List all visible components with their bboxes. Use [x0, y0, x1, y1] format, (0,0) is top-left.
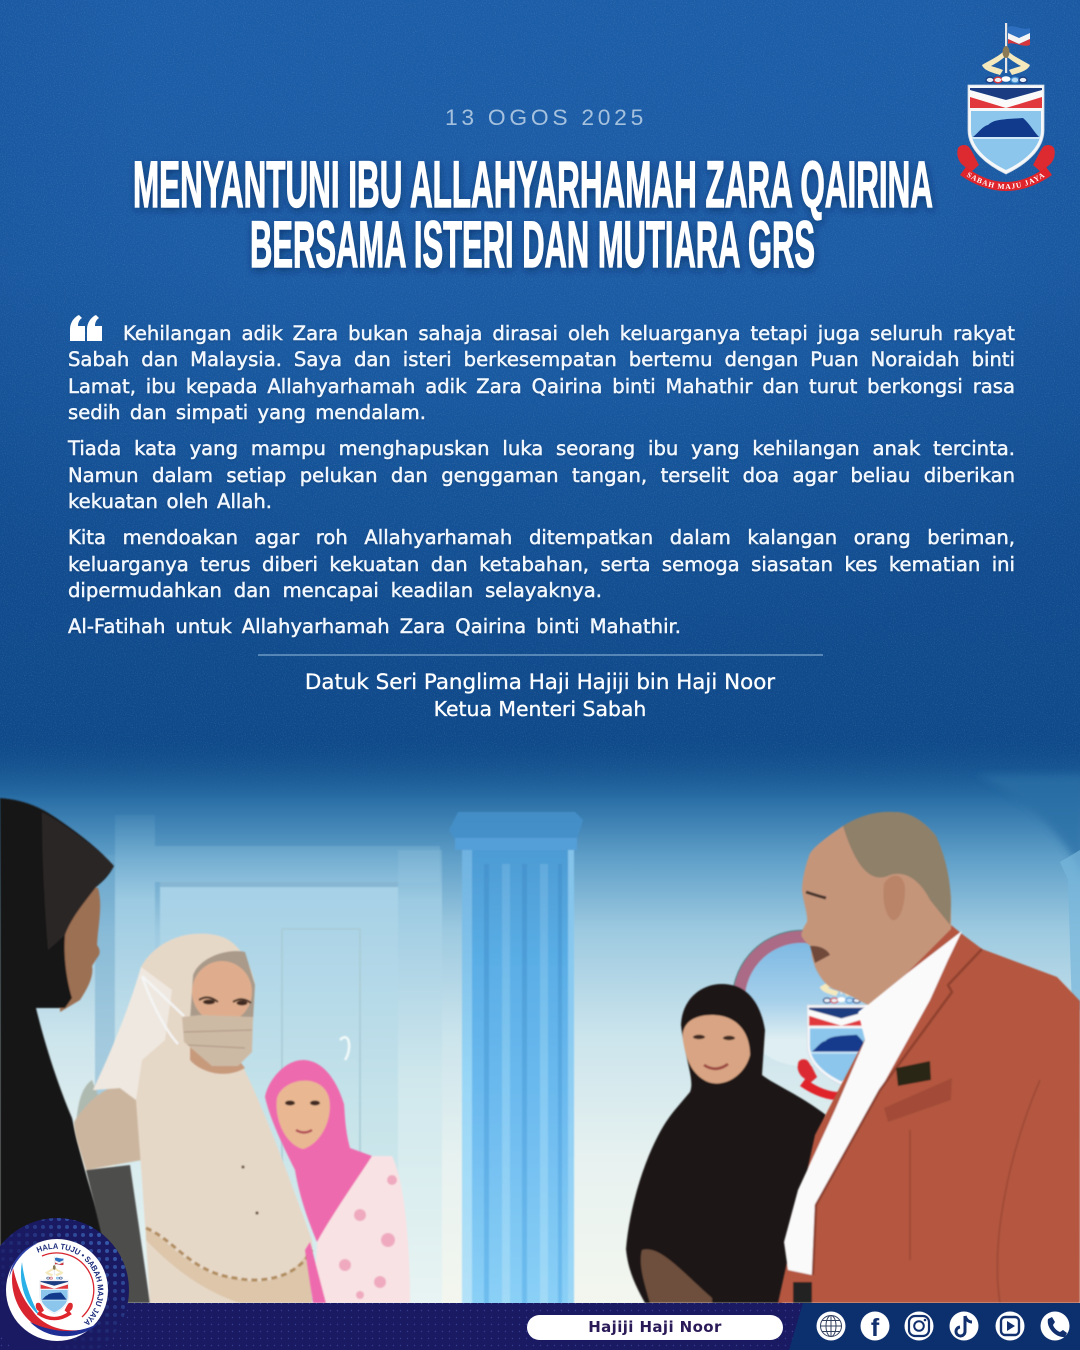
- social icons row: [816, 1312, 1070, 1342]
- signature role: Ketua Menteri Sabah: [434, 697, 646, 721]
- name pill: [527, 1315, 783, 1340]
- icon: globe: [816, 1312, 846, 1340]
- signature name: Datuk Seri Panglima Haji Hajiji bin Haji Noor: [305, 670, 775, 695]
- quote text: [68, 322, 1015, 638]
- date: 13 OGOS 2025: [445, 105, 647, 130]
- icon: Sabah crest: SABAH MAJU JAYA: [966, 172, 1045, 190]
- paragraph 1: [68, 322, 1015, 424]
- logo badge: Hala Tuju Sabah Maju Jaya: HALA TUJU • SABAH MAJU JAYA: [36, 1243, 104, 1325]
- icon: tiktok: [950, 1312, 978, 1340]
- icon: facebook: [860, 1312, 890, 1342]
- photo: blue pillar: [449, 812, 583, 1310]
- person: woman with pink hijab: [265, 1060, 410, 1303]
- paragraph 1: Lamat, ibu kepada Allahyarhamah adik Zara Qairina binti Mahathir dan turut berkongsi rasa: [68, 375, 1015, 398]
- paragraph 3: [68, 526, 1015, 602]
- paragraph 2: Namun dalam setiap pelukan dan genggaman tangan, terselit doa agar beliau diberikan: [68, 464, 1015, 487]
- title: [133, 147, 933, 281]
- paragraph 4: Al-Fatihah untuk Allahyarhamah Zara Qairina binti Mahathir.: [68, 615, 681, 638]
- icon: instagram: [904, 1312, 934, 1340]
- paragraph 1: Sabah dan Malaysia. Saya dan isteri berkesempatan bertemu dengan Puan Noraidah binti: [68, 348, 1015, 371]
- icon: phone: [1040, 1312, 1070, 1340]
- paragraph 2: kekuatan oleh Allah.: [68, 490, 272, 513]
- icon: facebook: f: [871, 1314, 880, 1342]
- person: woman with beige hijab and mask: [74, 934, 312, 1303]
- paragraph 3: dipermudahkan dan mencapai keadilan selayaknya.: [68, 579, 602, 602]
- logo badge: Hala Tuju Sabah Maju Jaya: [0, 1218, 129, 1349]
- date: [132, 105, 936, 281]
- paragraph 1: Kehilangan adik Zara bukan sahaja dirasai oleh keluarganya tetapi juga seluruh rakyat: [123, 322, 1015, 345]
- paragraph 3: Kita mendoakan agar roh Allahyarhamah ditempatkan dalam kalangan orang beriman,: [68, 526, 1015, 549]
- person: woman in black hijab on the right: [626, 984, 826, 1303]
- footer bar: [0, 1303, 1080, 1350]
- divider: [258, 654, 823, 656]
- icon: video play: [996, 1312, 1024, 1340]
- name pill: Hajiji Haji Noor: [588, 1318, 722, 1336]
- paragraph 2: [68, 437, 1015, 513]
- photo: door and frame: [95, 815, 442, 1306]
- paragraph 3: keluarganya terus diberi kekuatan dan ketabahan, serta semoga siasatan kes kematian ini: [68, 553, 1015, 576]
- person: man in terracotta jacket: [778, 812, 1080, 1303]
- photo: wall: [0, 740, 1080, 1330]
- photo: wall emblem of Sabah: [733, 931, 885, 1100]
- icon: Sabah crest: [957, 23, 1055, 191]
- person: woman in black hijab on the left: [0, 798, 114, 1303]
- paragraph 2: Tiada kata yang mampu menghapuskan luka seorang ibu yang kehilangan anak tercinta.: [68, 437, 1015, 460]
- icon: opening quote mark: [70, 315, 102, 341]
- paragraph 1: sedih dan simpati yang mendalam.: [68, 401, 426, 424]
